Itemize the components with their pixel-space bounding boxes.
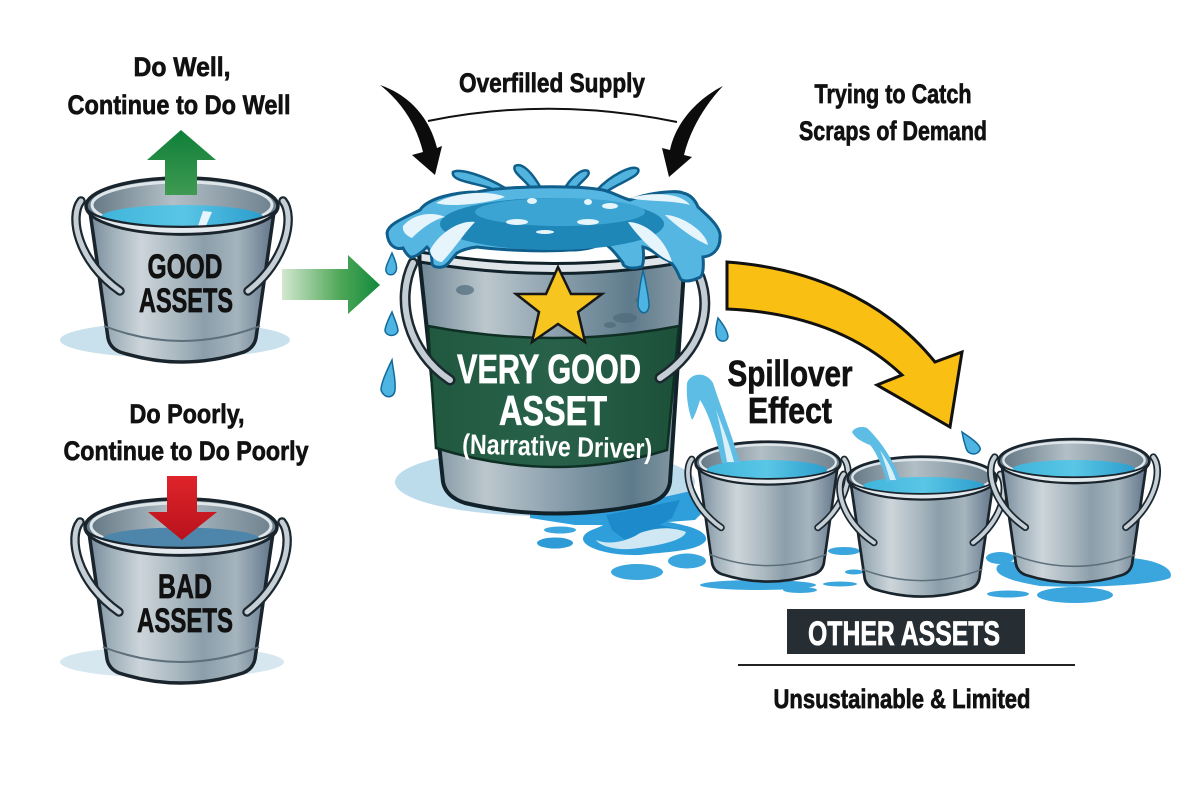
puddle: main (395, 448, 706, 580)
water mass (387, 187, 720, 281)
foam highlights (403, 193, 708, 262)
arrow: green right (282, 255, 380, 314)
arrow: black left (380, 85, 442, 175)
water stream: bucket 1 (687, 375, 740, 463)
text: bad assets: BAD (158, 568, 212, 606)
label: do poorly (64, 399, 308, 466)
green band (428, 326, 679, 467)
good assets bucket (60, 178, 290, 362)
label: trying to catch: Scraps of Demand (799, 116, 987, 146)
text: very good asset: VERY GOOD (457, 346, 641, 392)
handles (405, 263, 450, 380)
label: overfilled supply: Overfilled Supply (459, 68, 645, 98)
label: other assets: OTHER ASSETS (808, 615, 1000, 653)
other asset bucket 3 (991, 439, 1157, 583)
label: do well: Continue to Do Well (68, 90, 290, 120)
text: bad assets: ASSETS (137, 602, 233, 640)
label: do poorly: Continue to Do Poorly (64, 436, 308, 466)
arrow: yellow spillover (727, 262, 962, 427)
other asset bucket 1 (687, 375, 848, 582)
text: good assets: ASSETS (139, 282, 233, 320)
icon: star (516, 267, 602, 342)
arrow: red down (148, 476, 217, 540)
arrow: black right (662, 86, 723, 177)
text: very good asset: (Narrative Driver) (462, 429, 653, 464)
speckles (456, 285, 645, 328)
text: very good asset (457, 346, 653, 464)
label: do well: Do Well, (134, 52, 230, 82)
divider line (738, 664, 1075, 666)
label: unsustainable: Unsustainable & Limited (774, 684, 1030, 714)
label: spillover effect (728, 353, 852, 431)
water surface: good bucket (101, 205, 263, 229)
water surface: bad bucket (102, 528, 260, 550)
label: trying to catch (799, 79, 987, 146)
text: good assets: GOOD (148, 248, 222, 286)
label: trying to catch: Trying to Catch (814, 79, 972, 109)
body (419, 255, 685, 514)
water: bucket 3 (1013, 460, 1135, 478)
very good asset bucket (405, 252, 705, 514)
text: very good asset: ASSET (499, 387, 607, 434)
darker surface (440, 198, 664, 250)
label: spillover effect: Spillover (728, 353, 852, 394)
brace curve under overfilled supply (428, 109, 677, 122)
rim (420, 252, 686, 274)
arrow: green up (147, 130, 216, 195)
water: bucket 1 (707, 460, 827, 480)
water stream: bucket 2 (852, 427, 900, 482)
label: other assets (787, 609, 1025, 654)
splashes (453, 165, 638, 192)
label: do poorly: Do Poorly, (130, 399, 244, 429)
overflowing water (387, 165, 720, 281)
text: bad assets (137, 568, 233, 640)
text: good assets (139, 248, 233, 320)
puddles: other assets (700, 547, 1171, 603)
other asset bucket 2 (840, 427, 1004, 597)
label: spillover effect: Effect (748, 390, 832, 431)
bad assets bucket (60, 499, 287, 683)
water droplets (381, 253, 980, 454)
label: do well (68, 52, 290, 120)
water: bucket 2 (863, 477, 985, 495)
